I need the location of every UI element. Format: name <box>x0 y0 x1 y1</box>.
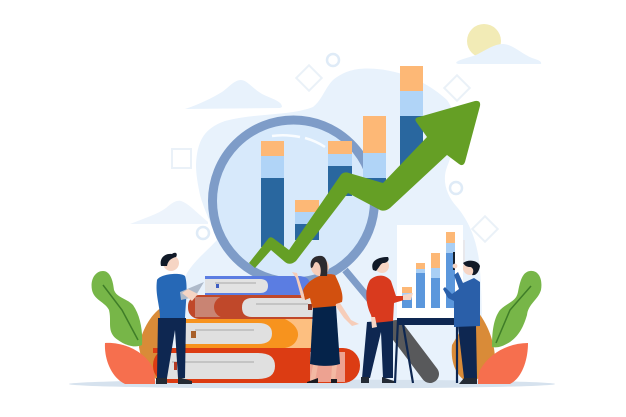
cloud: top right <box>456 44 541 64</box>
left green leaf <box>92 271 142 346</box>
left brown leaf <box>139 307 163 380</box>
magnifier handle <box>345 270 430 374</box>
left plant <box>92 271 163 384</box>
person: man in red shirt <box>361 257 413 383</box>
board bar chart <box>402 232 455 308</box>
book 4: red <box>153 348 360 383</box>
right red leaf <box>478 343 528 384</box>
right plant <box>452 271 541 384</box>
sun <box>467 24 501 58</box>
book 1: blue <box>205 276 310 295</box>
decorative shapes <box>172 54 498 242</box>
person: woman <box>292 256 359 383</box>
book 2: brown red <box>188 295 323 319</box>
board stand <box>395 318 457 383</box>
person: man in blue jacket <box>443 240 480 384</box>
cloud: left <box>130 201 208 224</box>
book 3: orange <box>183 319 312 348</box>
book stack <box>153 276 360 383</box>
left red leaf <box>105 343 155 384</box>
ground shadow <box>69 380 555 388</box>
cloud: top left <box>185 80 282 109</box>
right brown leaf <box>452 308 495 382</box>
person: man with tablet <box>156 253 204 384</box>
background blob <box>160 68 482 385</box>
growth arrow <box>249 101 480 268</box>
magnifier lens <box>212 120 374 282</box>
bar chart in magnifier <box>261 66 423 247</box>
flipchart board <box>395 225 463 383</box>
right green leaf <box>492 271 541 347</box>
